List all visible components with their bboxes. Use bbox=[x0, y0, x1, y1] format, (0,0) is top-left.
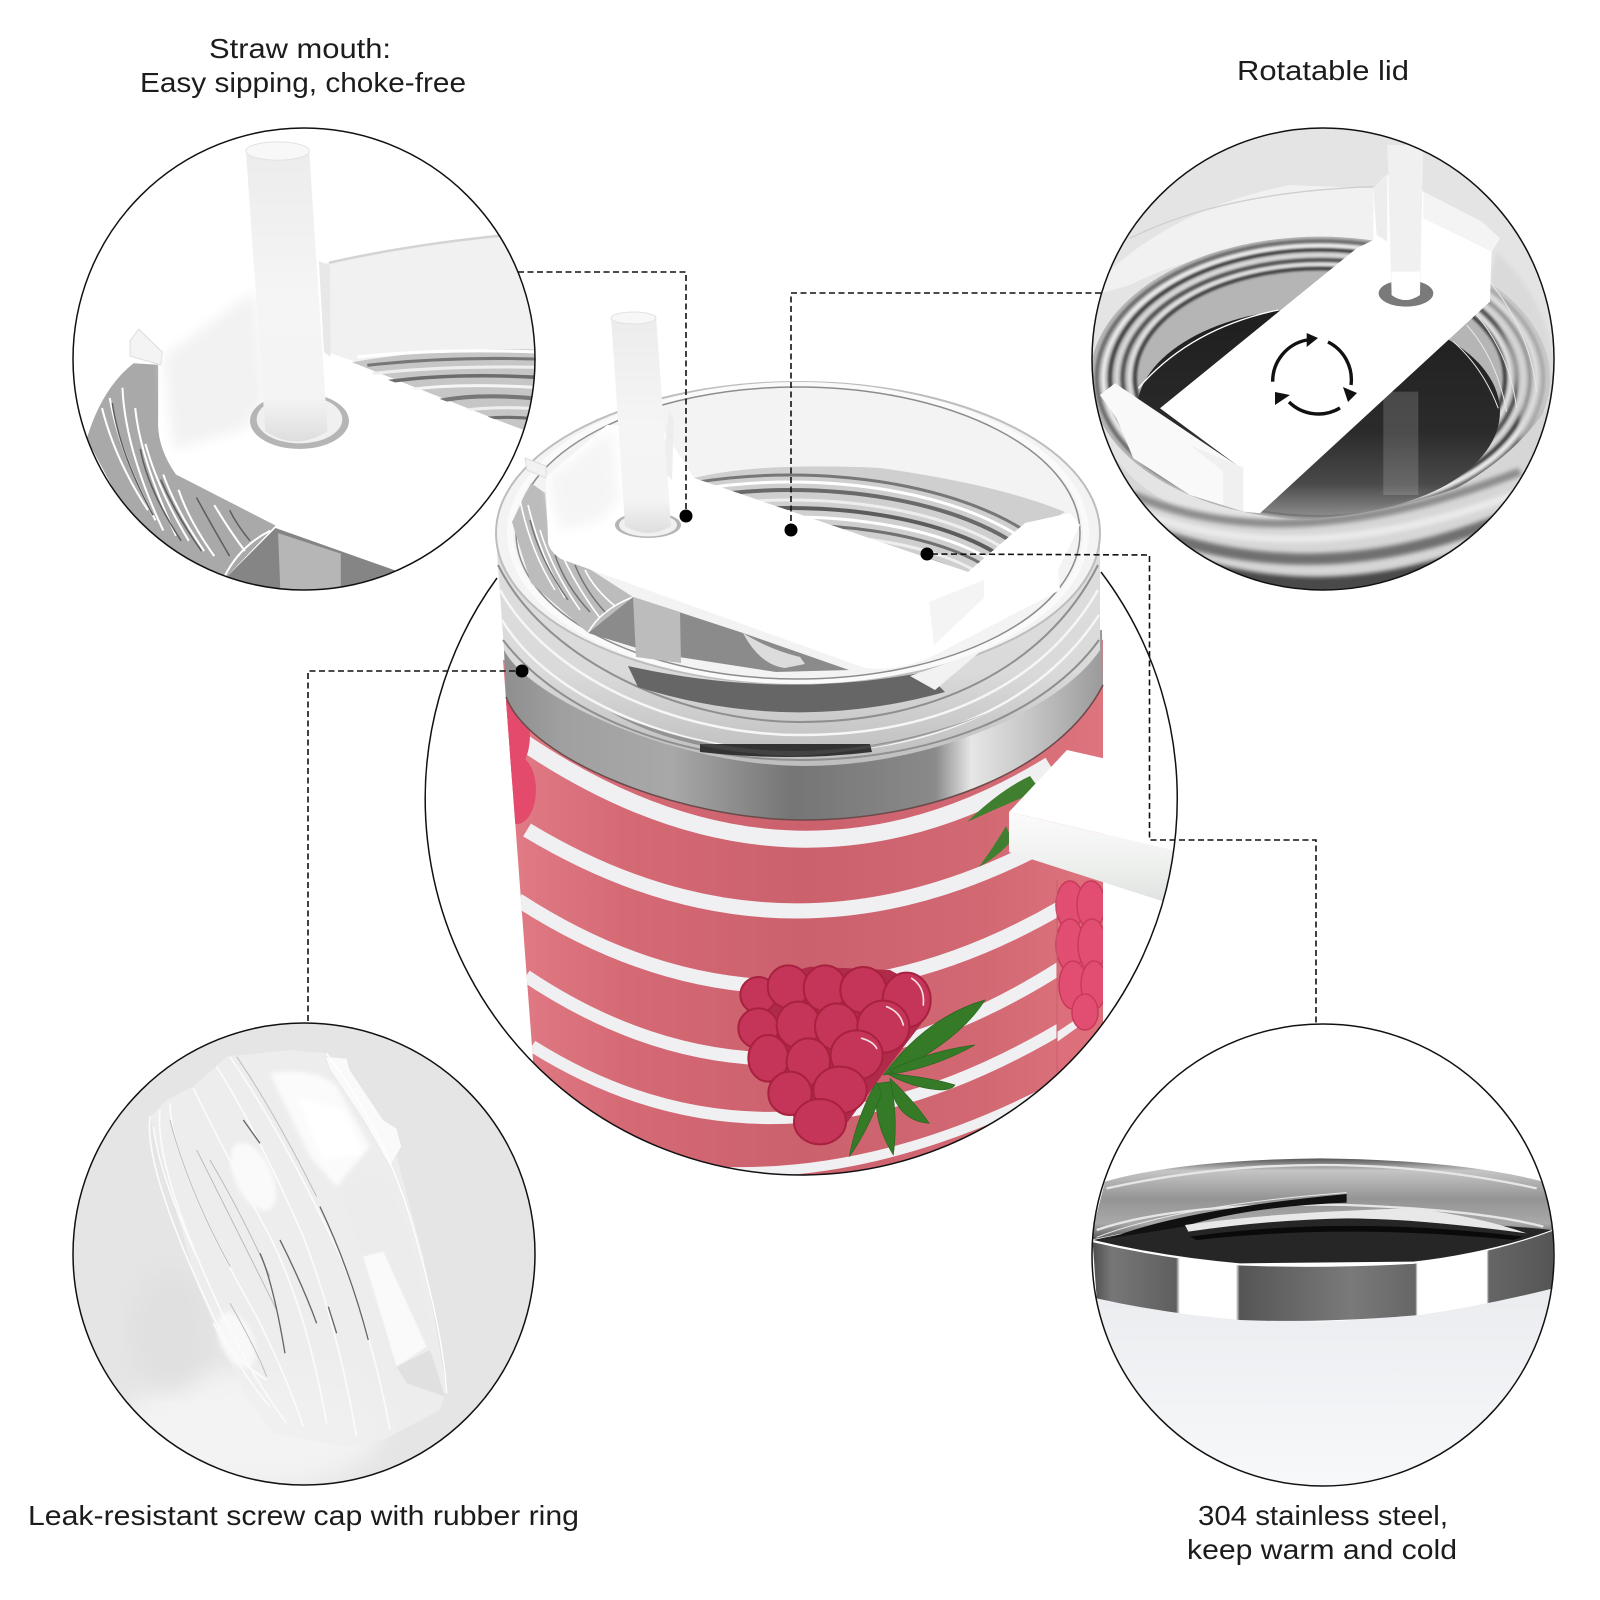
grey interior bbox=[228, 528, 395, 588]
panel: straw mouth detail circle bbox=[72, 128, 541, 602]
circle outline: straw mouth bbox=[73, 128, 535, 590]
callout line: screw cap bbox=[308, 664, 528, 1023]
grey straw shoulder bbox=[548, 430, 618, 530]
glass lid wall bbox=[496, 530, 1100, 766]
right side light wash over threads bbox=[1487, 258, 1553, 442]
callout line: straw mouth bbox=[518, 272, 692, 522]
steel band bbox=[504, 630, 1103, 820]
panel: central tumbler circle bbox=[503, 640, 1103, 1174]
far wall bbox=[327, 235, 541, 362]
threaded rim bbox=[1090, 1158, 1555, 1240]
callout line: rotatable lid bbox=[784, 293, 1101, 536]
glass cap body bbox=[190, 1258, 406, 1414]
threads bbox=[352, 349, 541, 434]
thin right threads bbox=[1453, 282, 1537, 412]
straw bbox=[611, 316, 671, 533]
slots bbox=[1110, 1194, 1347, 1238]
side panel of cap bbox=[340, 1170, 443, 1397]
threads on far wall bbox=[694, 466, 1065, 572]
leaves behind handle bbox=[967, 776, 1040, 822]
thread lines bbox=[149, 1057, 390, 1437]
inner top band bbox=[1103, 185, 1373, 292]
right flap bbox=[930, 513, 1080, 655]
label: stainless steel: 304 stainless steel, bbox=[1198, 1500, 1448, 1531]
label: leak-resistant screw cap: Leak-resistant screw cap with rubber ring bbox=[28, 1500, 579, 1531]
seam strip at right bbox=[1058, 964, 1073, 1032]
lip bbox=[525, 458, 546, 478]
interior dark panel bbox=[588, 597, 849, 672]
rotation arrows icon bbox=[1273, 333, 1357, 414]
circle outline: screw cap bbox=[73, 1023, 535, 1485]
dark inner crescent bbox=[628, 666, 945, 712]
label: straw mouth bbox=[140, 33, 466, 98]
bright top panel bbox=[270, 1072, 370, 1187]
white body bbox=[1080, 1287, 1573, 1497]
hole bbox=[1379, 280, 1433, 307]
label: rotatable lid: Rotatable lid bbox=[1237, 55, 1409, 86]
label: stainless steel bbox=[1187, 1500, 1457, 1565]
circle outline: rotatable lid bbox=[1092, 128, 1554, 590]
straw reflection bbox=[1383, 392, 1418, 495]
straw bbox=[246, 151, 328, 441]
handle of lid flap bbox=[1009, 750, 1190, 902]
main raspberry with leaves bbox=[738, 965, 985, 1157]
hole bbox=[250, 393, 349, 449]
straw hole bbox=[615, 512, 681, 538]
raspberry on right edge bbox=[1056, 881, 1107, 1030]
steel band bbox=[1093, 1230, 1553, 1321]
label: straw mouth: Easy sipping, choke-free bbox=[140, 67, 466, 98]
tumbler body with stripes bbox=[494, 640, 1107, 1200]
white mouthpiece bar bbox=[546, 425, 1000, 669]
callout line: stainless steel bbox=[920, 548, 1316, 1024]
panel: tumbler lid and steel band bbox=[496, 312, 1103, 820]
circle outline: central tumbler bbox=[425, 572, 1177, 1175]
panel: stainless steel rim detail circle bbox=[1093, 1158, 1554, 1482]
inner rim bbox=[510, 385, 1086, 681]
bright reflections in threads bbox=[232, 1144, 275, 1210]
top tab bbox=[325, 1057, 402, 1167]
front glass ring bbox=[1116, 406, 1548, 576]
white bar and flaps bbox=[1160, 175, 1500, 513]
bar bbox=[158, 374, 523, 476]
label: stainless steel: keep warm and cold bbox=[1187, 1534, 1457, 1565]
panel: rotatable lid detail circle bbox=[1083, 125, 1563, 598]
label: straw mouth: Straw mouth: bbox=[209, 33, 391, 64]
shoulder shading bbox=[163, 291, 265, 449]
streaked wall bbox=[87, 363, 276, 579]
dark cup interior bbox=[1137, 308, 1500, 515]
threads ellipse bbox=[1090, 237, 1550, 520]
dark interior bbox=[1093, 1217, 1553, 1263]
circle outline: stainless steel bbox=[1092, 1024, 1554, 1486]
lip bbox=[130, 329, 162, 365]
panel: screw cap detail circle bbox=[72, 1020, 536, 1490]
left streaked inner wall bbox=[512, 483, 633, 633]
straw bbox=[1387, 145, 1423, 300]
far wall of lid bbox=[496, 382, 1100, 684]
raspberry on left edge bbox=[506, 700, 536, 824]
